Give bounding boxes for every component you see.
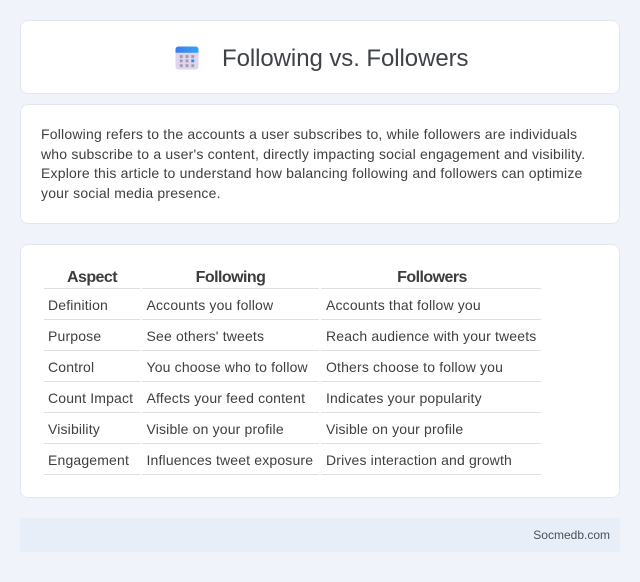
row: count impact bbox=[48, 390, 482, 406]
row: control: You choose who to follow bbox=[146, 359, 308, 375]
row: definition: Definition bbox=[48, 297, 108, 313]
table header: Following bbox=[196, 269, 265, 286]
footer bar bbox=[20, 518, 620, 552]
intro text bbox=[41, 126, 585, 201]
row: count impact: Indicates your popularity bbox=[326, 390, 482, 406]
row: definition bbox=[48, 297, 481, 313]
row: definition: Accounts you follow bbox=[146, 297, 273, 313]
table header bbox=[67, 269, 467, 286]
row: visibility: Visible on your profile bbox=[326, 421, 463, 437]
table header: Aspect bbox=[67, 269, 117, 286]
row: definition: Accounts that follow you bbox=[326, 297, 481, 313]
panel: comparison table card bbox=[20, 244, 620, 498]
row: engagement: Engagement bbox=[48, 452, 129, 468]
row: engagement: Influences tweet exposure bbox=[146, 452, 313, 468]
row: purpose bbox=[48, 328, 536, 344]
footer credit: Socmedb.com bbox=[533, 528, 610, 542]
table header: Followers bbox=[397, 269, 467, 286]
intro text: Explore this article to understand how balancing following and followers can optimize bbox=[41, 165, 583, 181]
row: purpose: Reach audience with your tweets bbox=[326, 328, 536, 344]
panel: title card bbox=[20, 20, 620, 94]
intro text: your social media presence. bbox=[41, 184, 221, 200]
row: control bbox=[48, 359, 503, 375]
row: count impact: Count Impact bbox=[48, 390, 133, 406]
row: control: Others choose to follow you bbox=[326, 359, 503, 375]
icon: calendar bbox=[175, 46, 199, 70]
row: engagement: Drives interaction and growth bbox=[326, 452, 512, 468]
row: engagement bbox=[48, 452, 512, 468]
row: purpose: Purpose bbox=[48, 328, 101, 344]
comparison table bbox=[44, 269, 541, 475]
row: control: Control bbox=[48, 359, 94, 375]
row: visibility: Visibility bbox=[48, 421, 100, 437]
title: Following vs. Followers bbox=[222, 45, 468, 72]
row: visibility bbox=[48, 421, 463, 437]
panel: intro text card bbox=[20, 104, 620, 224]
row: purpose: See others' tweets bbox=[146, 328, 264, 344]
row: visibility: Visible on your profile bbox=[146, 421, 284, 437]
row: count impact: Affects your feed content bbox=[146, 390, 305, 406]
intro text: who subscribe to a user's content, directly impacting social engagement and visibility. bbox=[41, 146, 585, 162]
intro text: Following refers to the accounts a user subscribes to, while followers are individuals bbox=[41, 126, 577, 142]
